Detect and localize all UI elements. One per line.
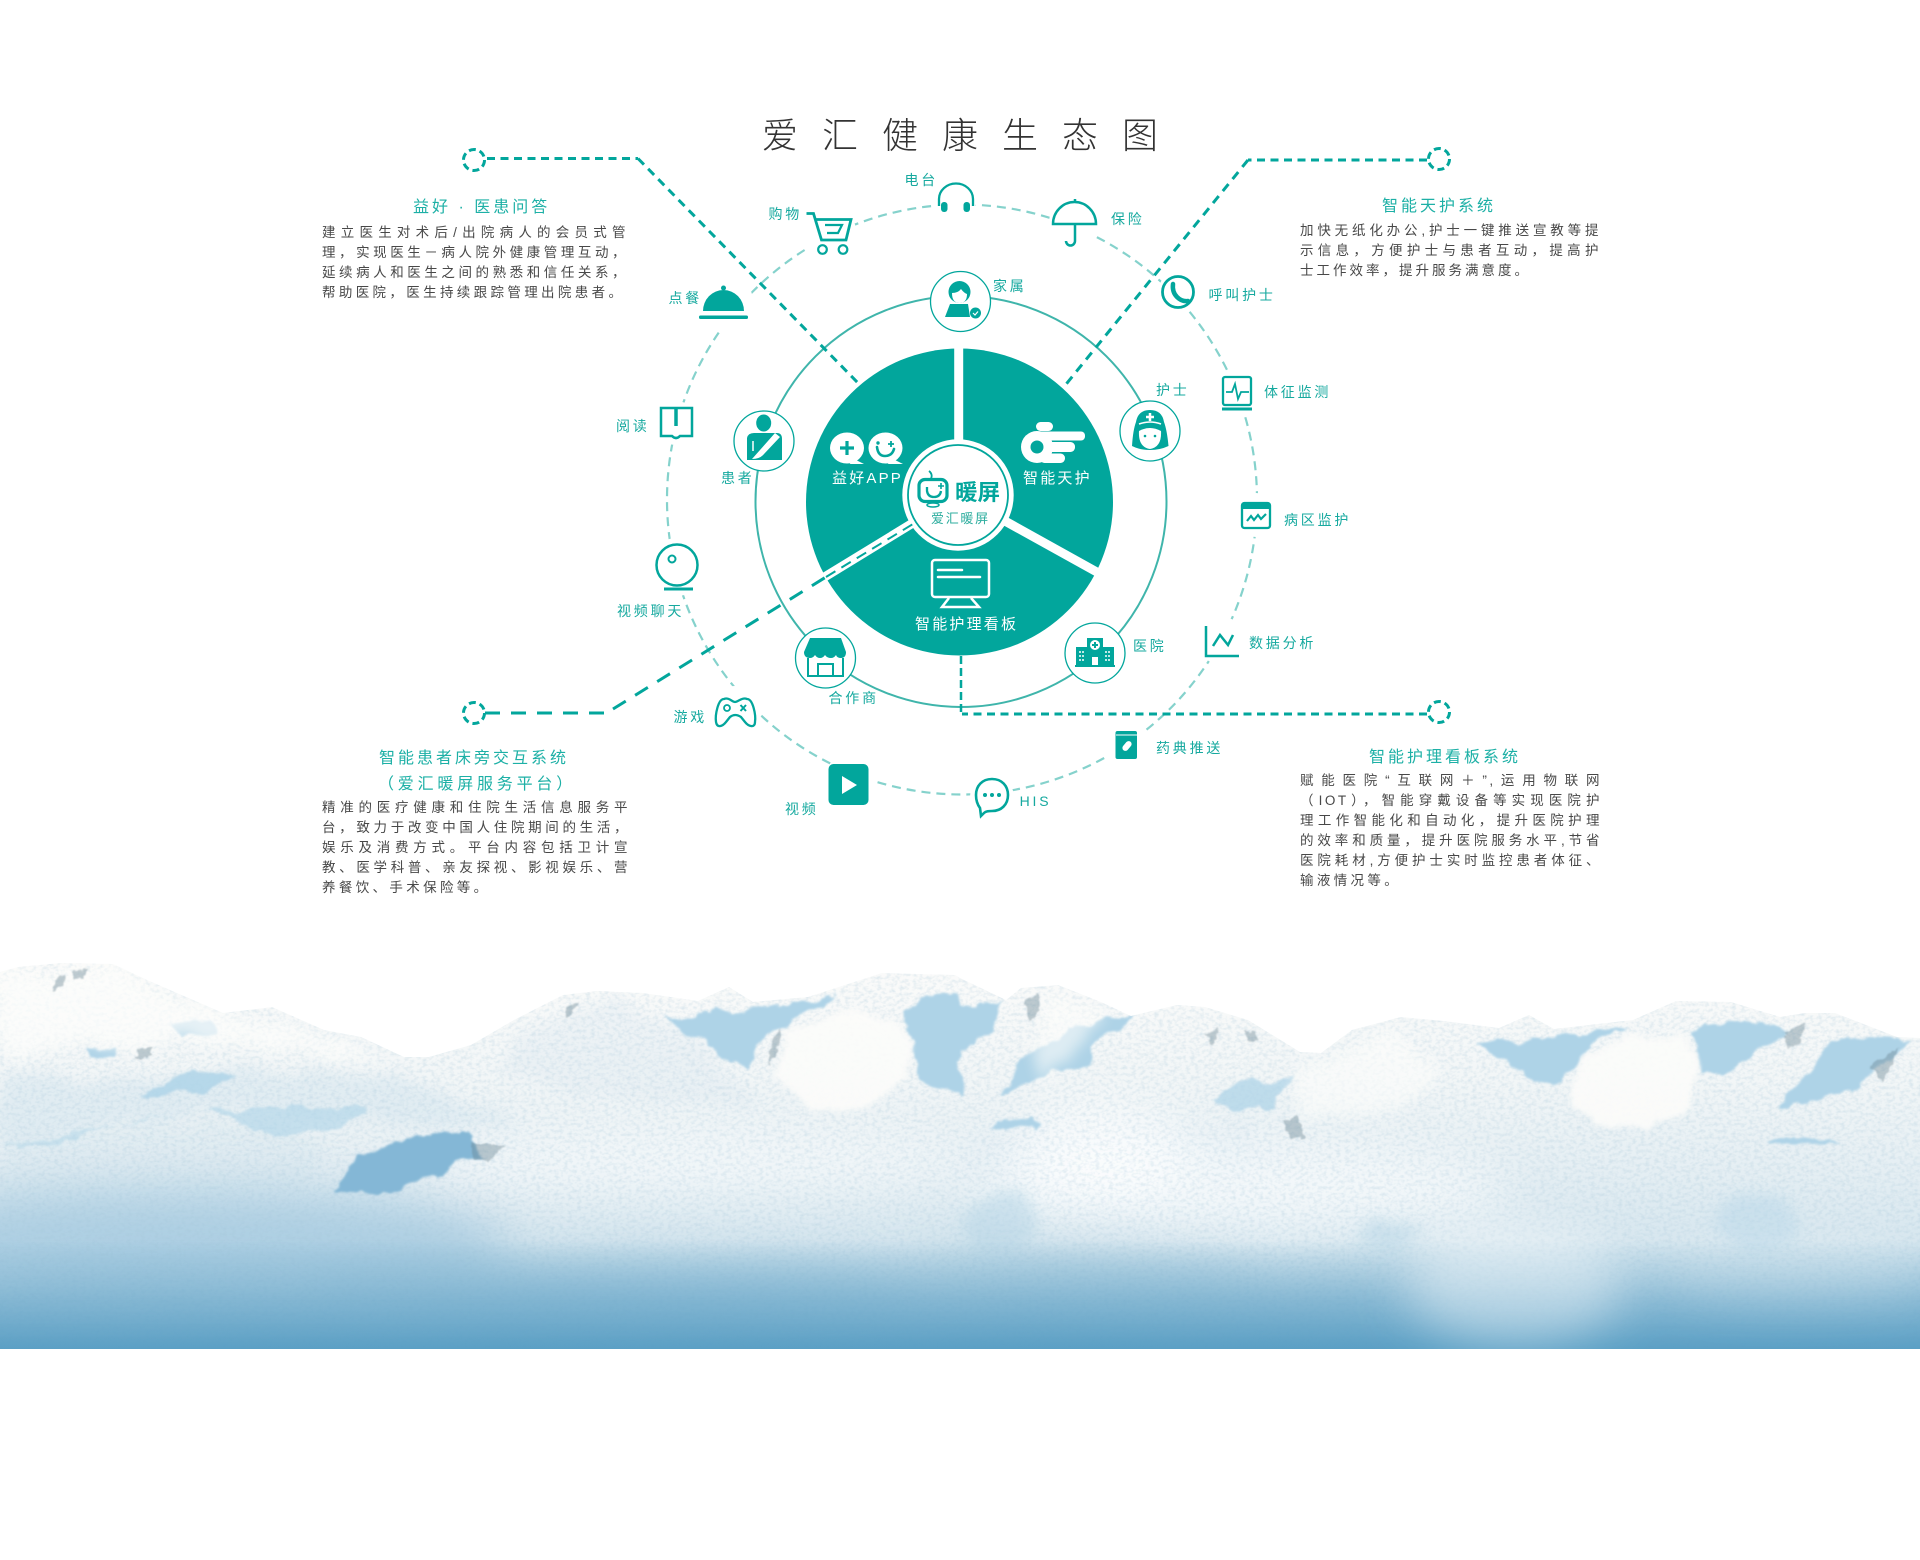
connector: bottom left [464,524,913,724]
text block: 智能护理看板系统 [1300,773,1602,888]
node: patient [734,411,794,471]
label: 视频: 视频 [785,801,819,817]
label: 家属: 家属 [993,278,1027,294]
icon: umbrella, 保险 [1053,199,1096,246]
text block: 智能护理看板系统: 输液情况等。 [1300,873,1401,888]
text block: 智能天护系统 [1300,223,1601,278]
icon: shopping cart, 购物 [806,214,851,254]
main diagram and landscape canvas [0,118,1920,1349]
label: 药典推送: 药典推送 [1156,740,1223,756]
icon: camera, 视频聊天 [656,544,698,589]
label: 呼叫护士: 呼叫护士 [1208,287,1276,303]
text block: 智能患者床旁交互系统: 精准的医疗健康和住院生活信息服务平 [322,800,630,815]
text block: 智能患者床旁交互系统: 娱乐及消费方式。平台内容包括卫计宣 [322,840,630,855]
text block: 益好问答: 延续病人和医生之间的熟悉和信任关系， [322,265,628,280]
icon: open book, 阅读 [661,408,692,438]
text block: 智能患者床旁交互系统: 台，致力于改变中国人住院期间的生活， [322,820,630,835]
label: HIS: HIS [1020,793,1051,809]
icon: vitals monitor, 体征监测 [1222,377,1252,409]
heading: 智能患者床旁交互系统: 智能患者床旁交互系统 [379,749,569,767]
label: 病区监护: 病区监护 [1284,512,1351,528]
icon: robot logo [919,471,947,507]
icon: food cloche, 点餐 [699,286,748,319]
label: 电台: 电台 [904,172,938,188]
label: 点餐: 点餐 [668,290,702,306]
icon: winged logo [1021,422,1085,463]
icon: phone, 呼叫护士 [1162,276,1194,308]
title: 爱汇健康生态图 [762,115,1182,156]
text block: 智能患者床旁交互系统 [322,800,630,895]
label: 护士: 护士 [1156,382,1190,398]
icon: ward monitor, 病区监护 [1242,503,1270,528]
icon: video play, 视频 [828,764,868,805]
label: 智能护理看板: 智能护理看板 [915,615,1018,633]
icon: monitor [932,560,989,607]
icon: pill book, 药典推送 [1116,731,1137,759]
label: 益好APP: 益好APP [832,470,903,487]
text block: 益好问答 [322,225,628,300]
icon: plus chat bubble [830,432,864,464]
label: 智能天护: 智能天护 [1023,469,1092,487]
connector: top right [1063,148,1450,388]
label: 体征监测: 体征监测 [1264,384,1331,400]
heading: 智能护理看板系统: 智能护理看板系统 [1369,748,1521,766]
icon: line chart, 数据分析 [1206,626,1239,656]
icon clearance on outer ring [648,176,1278,819]
text block: 智能护理看板系统: 赋能医院“互联网＋”,运用物联网 [1300,773,1602,788]
text block: 智能天护系统: 示信息，方便护士与患者互动，提高护 [1300,243,1601,258]
label: 患者: 患者 [721,470,755,486]
label: 爱汇暖屏: 爱汇暖屏 [931,511,990,526]
icon: smile chat bubble [868,432,903,464]
node: family [930,272,990,332]
heading: 智能天护系统: 智能天护系统 [1382,197,1496,215]
text block: 智能护理看板系统: （IOT），智能穿戴设备等实现医院护 [1300,793,1602,808]
connector: bottom right [961,656,1450,722]
icon: chat bubble, HIS [976,779,1008,816]
outer dashed ring [667,204,1257,794]
text block: 智能患者床旁交互系统: 养餐饮、手术保险等。 [322,880,490,895]
label: 保险: 保险 [1111,211,1145,227]
text block: 益好问答: 建立医生对术后/出院病人的会员式管 [322,225,628,240]
text block: 智能护理看板系统: 的效率和质量，提升医院服务水平,节省 [1300,833,1602,848]
icon: game controller, 游戏 [716,699,755,726]
icon: headphones, 电台 [939,183,973,212]
label: 购物: 购物 [768,206,802,222]
text block: 智能护理看板系统: 理工作智能化和自动化，提升医院护理 [1300,813,1602,828]
text block: 智能天护系统: 加快无纸化办公,护士一键推送宣教等提 [1300,223,1601,238]
label: 合作商: 合作商 [828,690,879,706]
text block: 益好问答: 理，实现医生－病人院外健康管理互动， [322,245,628,260]
logo text: 暖屏 [955,480,1000,505]
text block: 益好问答: 帮助医院，医生持续跟踪管理出院患者。 [322,285,625,300]
node: partner store [796,628,856,688]
text block: 智能天护系统: 士工作效率，提升服务满意度。 [1300,263,1531,278]
middle ring [756,296,1166,707]
label: 医院: 医院 [1133,638,1167,654]
text block: 智能患者床旁交互系统: 教、医学科普、亲友探视、影视娱乐、营 [322,860,630,875]
label: 阅读: 阅读 [616,418,650,434]
node: nurse [1120,401,1180,461]
label: 数据分析: 数据分析 [1249,635,1316,651]
label: 视频聊天: 视频聊天 [617,603,684,619]
mountain landscape [0,950,1920,1350]
heading: 爱汇暖屏服务平台: （爱汇暖屏服务平台） [378,775,576,793]
text block: 智能护理看板系统: 医院耗材,方便护士实时监控患者体征、 [1300,853,1602,868]
connector: top left [464,150,860,385]
central disc with three segments [806,340,1113,656]
heading: 益好 · 医患问答: 益好 · 医患问答 [413,198,550,216]
node: hospital [1065,623,1125,683]
label: 游戏: 游戏 [674,709,707,725]
